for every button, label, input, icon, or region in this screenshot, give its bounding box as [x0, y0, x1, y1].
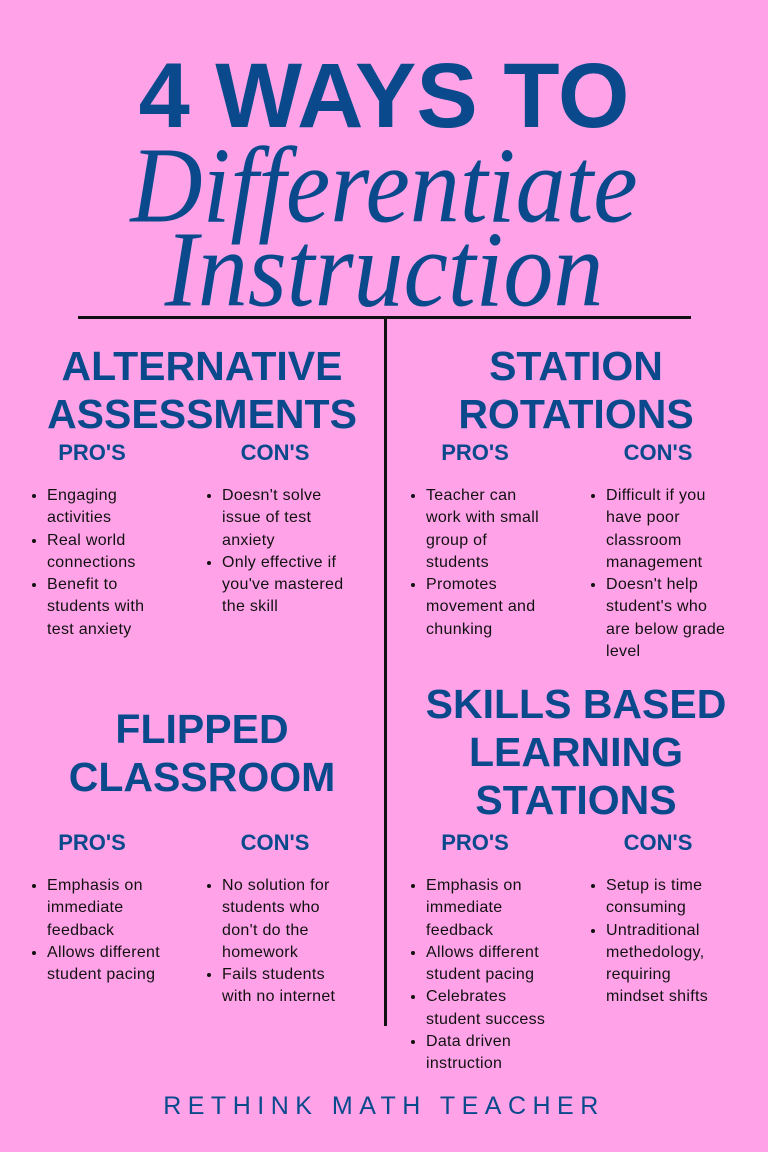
- panel: skills based learning stations: [411, 681, 726, 1072]
- cons list: [591, 877, 708, 1005]
- cons list: Setup is time: [606, 877, 702, 894]
- cons list: Difficult if you: [606, 487, 706, 504]
- pros list: Allows different: [47, 944, 160, 961]
- heading: ASSESSMENTS: [47, 391, 357, 437]
- heading: LEARNING: [469, 729, 683, 775]
- cons list: consuming: [606, 899, 686, 916]
- pros list: immediate: [426, 899, 503, 916]
- cons list: with no internet: [222, 988, 335, 1005]
- pros list: Emphasis on: [47, 877, 143, 894]
- pros list: Data driven: [426, 1033, 511, 1050]
- pros heading: PRO'S: [58, 440, 126, 465]
- panel: alternative assessments: [32, 343, 357, 638]
- cons list: student's who: [606, 598, 707, 615]
- heading: ALTERNATIVE: [62, 343, 342, 389]
- cons list: requiring: [606, 966, 671, 983]
- cons list: mindset shifts: [606, 988, 708, 1005]
- pros list: Allows different: [426, 944, 539, 961]
- cons list: have poor: [606, 509, 680, 526]
- pros list: Celebrates: [426, 988, 506, 1005]
- cons list: you've mastered: [222, 576, 343, 593]
- pros list: work with small: [426, 509, 539, 526]
- cons list: anxiety: [222, 532, 275, 549]
- pros list: students: [426, 554, 489, 571]
- pros list: students with: [47, 598, 144, 615]
- pros list: student success: [426, 1011, 545, 1028]
- cons list: [591, 487, 725, 660]
- cons list: are below grade: [606, 621, 725, 638]
- pros heading: PRO'S: [441, 440, 509, 465]
- pros list: Emphasis on: [426, 877, 522, 894]
- pros list: group of: [426, 532, 487, 549]
- heading: [458, 343, 694, 437]
- cons list: [207, 487, 343, 615]
- subtitle line 1: Differentiate: [130, 126, 638, 245]
- cons list: the skill: [222, 598, 278, 615]
- pros list: feedback: [47, 922, 114, 939]
- pros list: [411, 877, 545, 1072]
- cons list: management: [606, 554, 702, 571]
- pros list: [32, 487, 144, 638]
- heading: STATION: [489, 343, 663, 389]
- cons list: homework: [222, 944, 298, 961]
- cons heading: CON'S: [241, 440, 309, 465]
- cons heading: CON'S: [241, 830, 309, 855]
- heading: FLIPPED: [115, 706, 289, 752]
- cons list: issue of test: [222, 509, 311, 526]
- pros list: Teacher can: [426, 487, 516, 504]
- cons heading: CON'S: [624, 830, 692, 855]
- pros list: activities: [47, 509, 111, 526]
- cons list: classroom: [606, 532, 682, 549]
- pros list: Engaging: [47, 487, 117, 504]
- cons list: Untraditional: [606, 922, 700, 939]
- pros heading: PRO'S: [441, 830, 509, 855]
- pros list: instruction: [426, 1055, 502, 1072]
- pros heading: PRO'S: [58, 830, 126, 855]
- cons list: Fails students: [222, 966, 325, 983]
- heading: SKILLS BASED: [426, 681, 726, 727]
- cons list: [207, 877, 335, 1005]
- pros list: [411, 487, 539, 638]
- pros list: Real world: [47, 532, 126, 549]
- cons heading: CON'S: [624, 440, 692, 465]
- cons list: Only effective if: [222, 554, 336, 571]
- pros list: connections: [47, 554, 136, 571]
- panel: flipped classroom: [32, 706, 335, 1005]
- pros list: test anxiety: [47, 621, 132, 638]
- pros list: Benefit to: [47, 576, 118, 593]
- cons list: students who: [222, 899, 320, 916]
- pros list: Promotes: [426, 576, 497, 593]
- pros list: [32, 877, 160, 983]
- horizontal divider: [78, 316, 691, 319]
- heading: CLASSROOM: [69, 754, 335, 800]
- pros list: chunking: [426, 621, 492, 638]
- panel: station rotations: [411, 343, 725, 660]
- cons list: No solution for: [222, 877, 330, 894]
- heading: [69, 706, 335, 800]
- cons list: level: [606, 643, 640, 660]
- heading: [47, 343, 357, 437]
- cons list: Doesn't help: [606, 576, 698, 593]
- cons list: methedology,: [606, 944, 704, 961]
- subtitle line 2: Instruction: [165, 210, 603, 329]
- footer: RETHINK MATH TEACHER: [163, 1092, 605, 1120]
- cons list: Doesn't solve: [222, 487, 321, 504]
- pros list: movement and: [426, 598, 535, 615]
- title: 4 WAYS TO: [139, 45, 629, 147]
- heading: STATIONS: [475, 777, 677, 823]
- heading: [426, 681, 726, 823]
- pros list: immediate: [47, 899, 124, 916]
- pros list: feedback: [426, 922, 493, 939]
- vertical divider: [384, 318, 387, 1026]
- cons list: don't do the: [222, 922, 309, 939]
- pros list: student pacing: [426, 966, 534, 983]
- pros list: student pacing: [47, 966, 155, 983]
- heading: ROTATIONS: [458, 391, 694, 437]
